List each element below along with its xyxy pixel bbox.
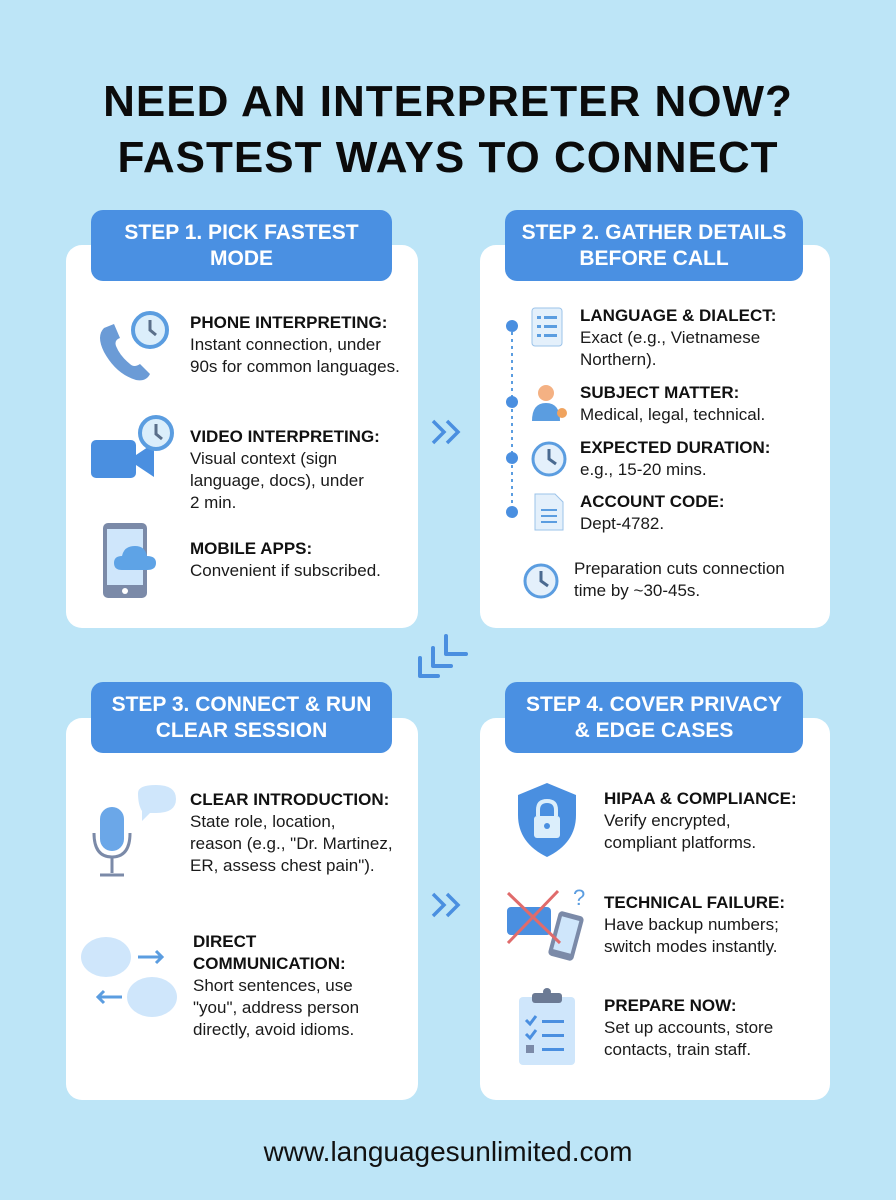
text: language: Exact (e.g., Vietnamese: [580, 328, 760, 347]
title: NEED AN INTERPRETER NOW?: [103, 77, 793, 126]
text: hipaa: Verify encrypted,: [604, 811, 731, 830]
icon: phone clock: [100, 311, 169, 380]
text: duration: EXPECTED DURATION:: [580, 438, 770, 457]
panel: step 4: [480, 718, 830, 1100]
text: phone: Instant connection, under: [190, 335, 381, 354]
text: account: [580, 492, 724, 533]
arrow: step3 to step4: [432, 892, 460, 918]
text: direct communication: COMMUNICATION:: [193, 954, 346, 973]
arrow: step2 to step3: [418, 634, 468, 678]
step 4 header: [505, 682, 803, 753]
text: phone: PHONE INTERPRETING:: [190, 313, 387, 332]
icon: list: [532, 308, 562, 346]
text: prepare: PREPARE NOW:: [604, 996, 737, 1015]
text: video: Visual context (sign: [190, 449, 337, 468]
text: video: 2 min.: [190, 493, 236, 512]
step 1 header: [91, 210, 392, 281]
text: duration: e.g., 15-20 mins.: [580, 460, 707, 479]
text: subject: SUBJECT MATTER:: [580, 383, 739, 402]
text: preparation note: Preparation cuts connection: [574, 559, 785, 578]
icon: conversation: [81, 937, 177, 1017]
text: mobile: MOBILE APPS:: [190, 539, 312, 558]
text: direct communication: DIRECT: [193, 932, 256, 951]
panel: step 1: [66, 245, 418, 628]
text: subject: Medical, legal, technical.: [580, 405, 765, 424]
text: introduction: [190, 790, 393, 875]
text: duration: [580, 438, 770, 479]
text: video: [190, 427, 380, 512]
text: introduction: CLEAR INTRODUCTION:: [190, 790, 389, 809]
step 3 header: [91, 682, 392, 753]
text: technical: [604, 893, 785, 956]
step 4 header: & EDGE CASES: [575, 719, 733, 742]
text: mobile: [190, 539, 381, 580]
text: prepare: Set up accounts, store: [604, 1018, 773, 1037]
text: language: [580, 306, 776, 369]
icon: mobile cloud: [103, 523, 156, 598]
step 4 header: STEP 4. COVER PRIVACY: [526, 693, 782, 716]
footer url: www.languagesunlimited.com: [264, 1136, 632, 1167]
text: prepare: contacts, train staff.: [604, 1040, 751, 1059]
icon: shield lock: [518, 783, 576, 857]
step 2 header: STEP 2. GATHER DETAILS: [522, 221, 786, 244]
text: prepare: [604, 996, 773, 1059]
text: language: Northern).: [580, 350, 657, 369]
text: preparation note: [574, 559, 785, 600]
step 2 header: BEFORE CALL: [579, 247, 729, 270]
text: hipaa: [604, 789, 797, 852]
panel: step 2: [480, 245, 830, 628]
step 2 header: [505, 210, 803, 281]
icon: clipboard: [519, 988, 575, 1065]
text: video: language, docs), under: [190, 471, 364, 490]
text: account: ACCOUNT CODE:: [580, 492, 724, 511]
text: introduction: ER, assess chest pain").: [190, 856, 375, 875]
text: video: VIDEO INTERPRETING:: [190, 427, 380, 446]
title: FASTEST WAYS TO CONNECT: [117, 133, 779, 182]
timeline: [506, 320, 518, 518]
text: direct communication: Short sentences, use: [193, 976, 353, 995]
text: direct communication: directly, avoid idioms.: [193, 1020, 354, 1039]
icon: document: [534, 494, 564, 530]
text: technical: TECHNICAL FAILURE:: [604, 893, 785, 912]
arrow: step1 to step2: [432, 420, 460, 444]
text: phone: 90s for common languages.: [190, 357, 400, 376]
text: subject: [580, 383, 765, 424]
icon: technical failure: ?: [573, 885, 585, 910]
icon: mic speech: [92, 785, 176, 876]
text: introduction: reason (e.g., "Dr. Martinez,: [190, 834, 393, 853]
icon: clock small: [524, 564, 558, 598]
icon: clock: [532, 442, 566, 476]
text: direct communication: [193, 932, 359, 1039]
step 1 header: STEP 1. PICK FASTEST: [124, 221, 359, 244]
icon: technical failure: [507, 885, 585, 961]
step 3 header: CLEAR SESSION: [156, 719, 327, 742]
text: introduction: State role, location,: [190, 812, 336, 831]
text: technical: switch modes instantly.: [604, 937, 778, 956]
text: preparation note: time by ~30-45s.: [574, 581, 700, 600]
text: phone: [190, 313, 400, 376]
panel: step 3: [66, 718, 418, 1100]
title: [103, 77, 793, 182]
text: hipaa: compliant platforms.: [604, 833, 756, 852]
step 3 header: STEP 3. CONNECT & RUN: [112, 693, 371, 716]
step 1 header: MODE: [210, 247, 273, 270]
text: language: LANGUAGE & DIALECT:: [580, 306, 776, 325]
text: mobile: Convenient if subscribed.: [190, 561, 381, 580]
icon: video camera: [91, 415, 174, 478]
text: direct communication: "you", address person: [193, 998, 359, 1017]
icon: person gear: [532, 385, 567, 421]
text: technical: Have backup numbers;: [604, 915, 779, 934]
text: hipaa: HIPAA & COMPLIANCE:: [604, 789, 797, 808]
text: account: Dept-4782.: [580, 514, 664, 533]
